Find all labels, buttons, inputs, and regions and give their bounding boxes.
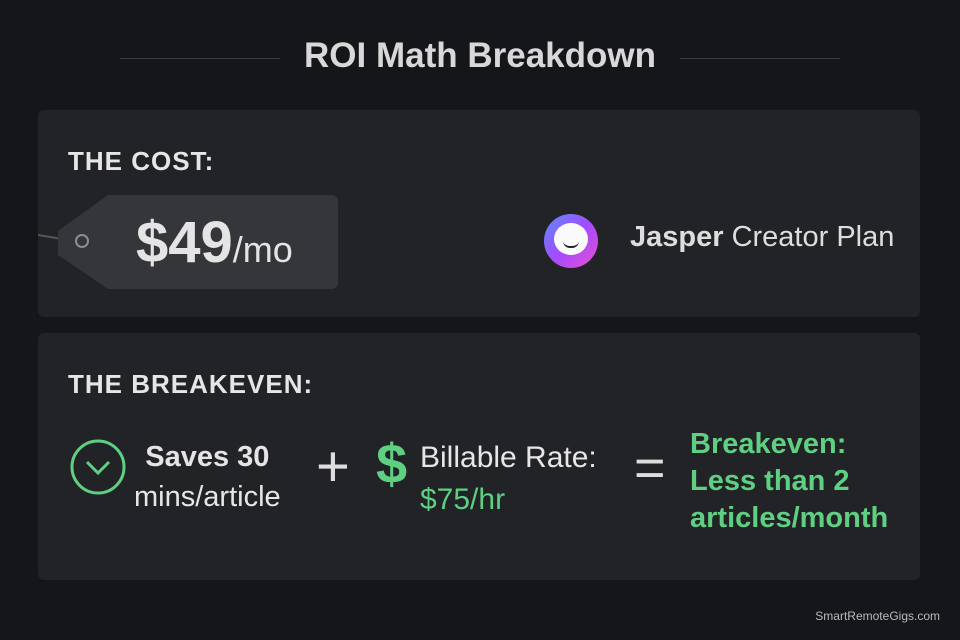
panel: cost: [38, 110, 920, 317]
result: articles/month: [690, 502, 888, 534]
result: Breakeven:: [690, 428, 846, 460]
billable rate: Billable Rate:: [420, 441, 597, 474]
saves text: Saves 30: [145, 441, 269, 473]
result: Less than 2: [690, 465, 850, 497]
heading: the breakeven: THE BREAKEVEN:: [68, 369, 313, 399]
price tag: [38, 195, 338, 289]
jasper logo: [544, 214, 598, 268]
saves text: [134, 441, 281, 513]
icon: clock: [70, 440, 126, 494]
icon: dollar: $: [376, 432, 407, 495]
billable rate: [420, 441, 597, 516]
plus: +: [316, 434, 350, 499]
equals: =: [634, 438, 666, 498]
panel: breakeven: [38, 333, 920, 580]
plan label: Jasper Creator Plan: [630, 221, 894, 253]
watermark: SmartRemoteGigs.com: [815, 609, 940, 623]
price tag: $49/mo: [136, 210, 293, 275]
saves text: mins/article: [134, 481, 281, 513]
heading: the cost: THE COST:: [68, 146, 214, 176]
billable rate: $75/hr: [420, 483, 505, 516]
title: ROI Math Breakdown: [304, 36, 656, 75]
result: [690, 428, 888, 534]
